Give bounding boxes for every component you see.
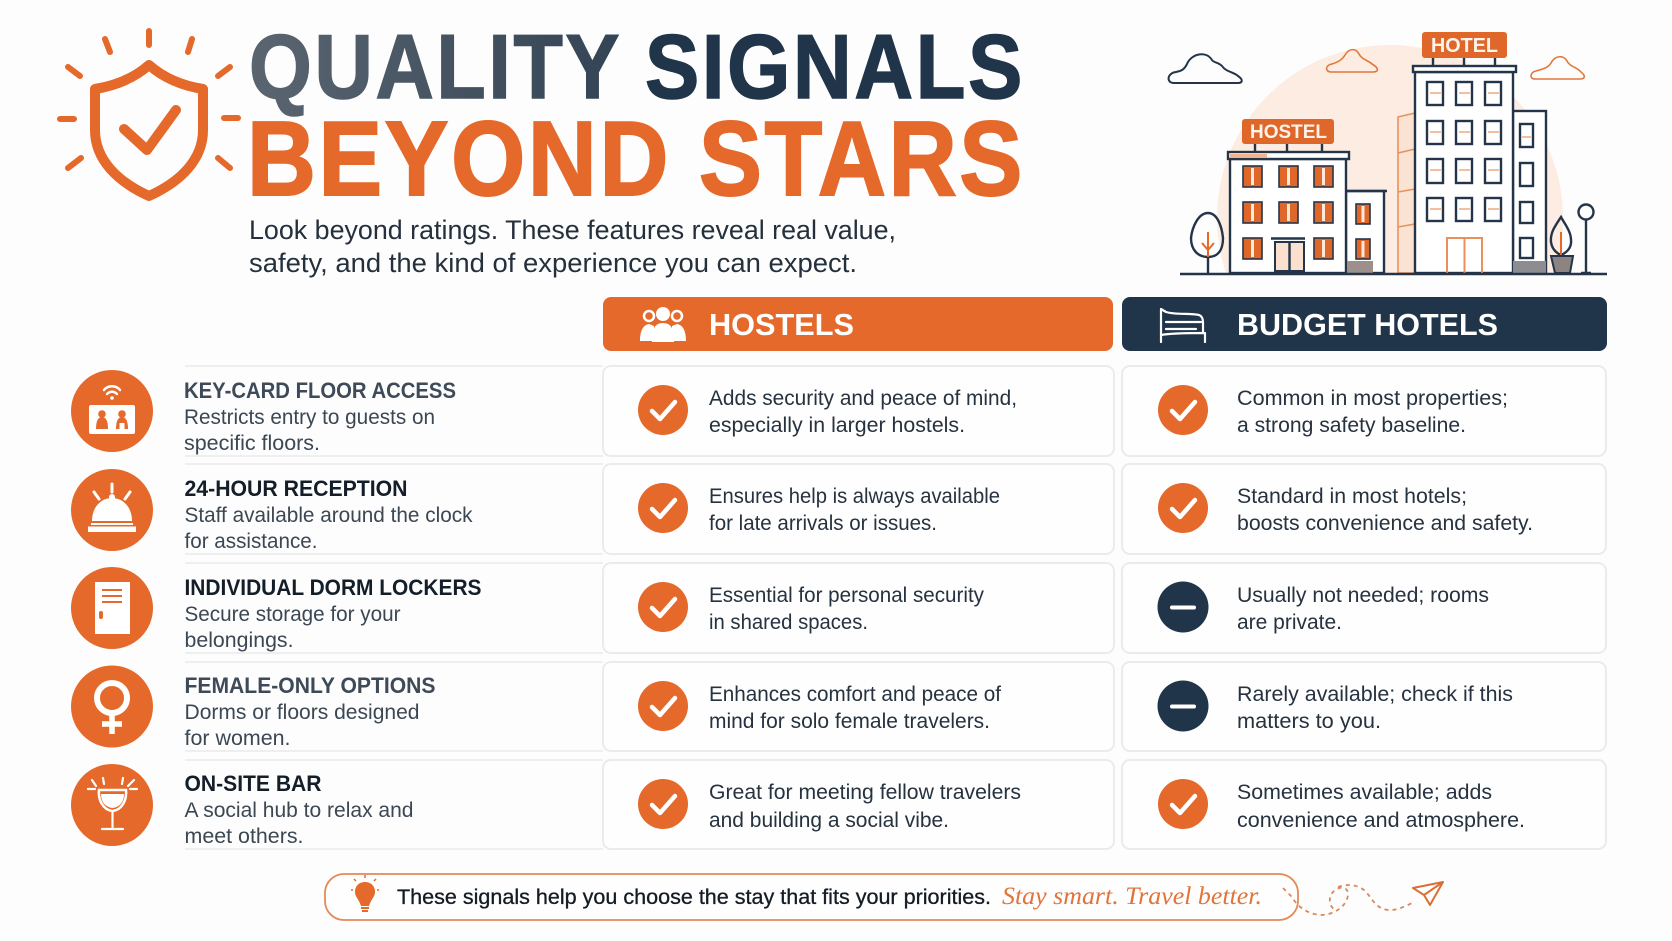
title: QUALITY xyxy=(249,17,622,118)
icon: key-card reader xyxy=(71,370,153,452)
icon: female symbol xyxy=(71,666,153,748)
icon: bed xyxy=(1161,309,1205,342)
card: budget bar: convenience and atmosphere. xyxy=(1237,809,1525,832)
subtitle: Look beyond ratings. These features reveal real value, xyxy=(249,215,896,245)
card: hostels key-card xyxy=(603,366,1114,456)
hotel building: HOTEL xyxy=(1431,35,1498,57)
row 3: individual dorm lockers xyxy=(71,563,603,653)
card: hostels bar: Great for meeting fellow travelers xyxy=(709,781,1021,804)
row 5: on-site bar: A social hub to relax and xyxy=(184,799,414,822)
card: hostels bar xyxy=(603,760,1114,849)
header: budget hotels: BUDGET HOTELS xyxy=(1237,307,1498,342)
card: hostels lockers xyxy=(603,563,1114,653)
icon: shield with check and rays xyxy=(60,31,238,196)
row 4: female-only options: for women. xyxy=(184,727,290,750)
icon: reception bell xyxy=(71,469,153,551)
hostel building xyxy=(1228,119,1387,273)
row 2: 24-hour reception xyxy=(71,464,603,554)
footer callout: Stay smart. Travel better. xyxy=(1002,883,1262,910)
hostels column cards xyxy=(603,366,1114,849)
card: budget key-card: a strong safety baseline. xyxy=(1237,414,1466,437)
card: budget female-only xyxy=(1122,662,1606,751)
card: budget lockers: Usually not needed; rooms xyxy=(1237,584,1489,607)
footer callout xyxy=(325,874,1298,920)
hostel building: HOSTEL xyxy=(1250,122,1327,143)
card: budget reception xyxy=(1122,464,1606,554)
card: hostels reception xyxy=(603,464,1114,554)
icon: group of people xyxy=(640,307,686,342)
budget hotels column cards xyxy=(1122,366,1606,849)
card: budget female-only: Rarely available; check if this xyxy=(1237,683,1513,706)
row 1: key-card floor access: Restricts entry to guests on xyxy=(184,406,435,429)
hotel building xyxy=(1413,32,1546,273)
card: hostels reception: Ensures help is always available xyxy=(709,485,1000,508)
row 4: female-only options: Dorms or floors designed xyxy=(184,701,420,724)
card: hostels bar: and building a social vibe. xyxy=(709,809,949,832)
row 3: individual dorm lockers: INDIVIDUAL DORM LOCKERS xyxy=(184,575,482,600)
card: budget bar: Sometimes available; adds xyxy=(1237,781,1492,804)
card: budget reception: Standard in most hotels; xyxy=(1237,485,1467,508)
header: budget hotels xyxy=(1122,297,1607,351)
footer callout: These signals help you choose the stay that fits your priorities. xyxy=(397,886,991,909)
row 1: key-card floor access: specific floors. xyxy=(184,432,320,455)
card: budget lockers: are private. xyxy=(1237,611,1342,634)
trees and lamp xyxy=(1191,204,1594,273)
row 1: key-card floor access xyxy=(71,366,603,456)
header: hostels xyxy=(603,297,1113,351)
card: hostels lockers: in shared spaces. xyxy=(709,611,868,634)
title: BEYOND xyxy=(247,100,671,218)
card: hostels reception: for late arrivals or issues. xyxy=(709,512,937,535)
row 5: on-site bar xyxy=(71,760,603,849)
icon: locker xyxy=(71,567,153,649)
row 1: key-card floor access: KEY-CARD FLOOR ACCESS xyxy=(184,378,456,403)
row 2: 24-hour reception: for assistance. xyxy=(184,530,318,553)
card: hostels female-only xyxy=(603,662,1114,751)
card: hostels key-card: Adds security and peace of mind, xyxy=(709,387,1017,410)
icon: light bulb xyxy=(351,875,379,911)
card: budget key-card xyxy=(1122,366,1606,456)
title: STARS xyxy=(699,100,1025,218)
row 4: female-only options: FEMALE-ONLY OPTIONS xyxy=(184,673,436,698)
illustration: hostel and hotel buildings xyxy=(1168,32,1607,276)
card: budget lockers xyxy=(1122,563,1606,653)
card: budget bar xyxy=(1122,760,1606,849)
row 2: 24-hour reception: 24-HOUR RECEPTION xyxy=(184,476,408,501)
card: budget key-card: Common in most properties; xyxy=(1237,387,1508,410)
subtitle: safety, and the kind of experience you can expect. xyxy=(249,248,857,278)
row 5: on-site bar: meet others. xyxy=(184,825,304,848)
title xyxy=(247,17,1025,218)
icon: wine glass xyxy=(71,764,153,846)
subtitle xyxy=(249,215,896,278)
card: hostels female-only: mind for solo female travelers. xyxy=(709,710,990,733)
card: budget reception: boosts convenience and safety. xyxy=(1237,512,1533,535)
card: hostels female-only: Enhances comfort and peace of xyxy=(709,683,1001,706)
paper plane with dashed trail xyxy=(1283,882,1443,915)
card: budget female-only: matters to you. xyxy=(1237,710,1381,733)
row 3: individual dorm lockers: belongings. xyxy=(184,629,294,652)
row 5: on-site bar: ON-SITE BAR xyxy=(184,771,322,796)
card: hostels lockers: Essential for personal security xyxy=(709,584,984,607)
title: SIGNALS xyxy=(645,17,1025,118)
card: hostels key-card: especially in larger hostels. xyxy=(709,414,965,437)
row 2: 24-hour reception: Staff available around the clock xyxy=(184,504,473,527)
row 4: female-only options xyxy=(71,662,603,751)
header: hostels: HOSTELS xyxy=(709,307,854,342)
hotel side annex left xyxy=(1398,113,1415,273)
row 3: individual dorm lockers: Secure storage for your xyxy=(184,603,400,626)
icon: clouds xyxy=(1169,50,1584,83)
